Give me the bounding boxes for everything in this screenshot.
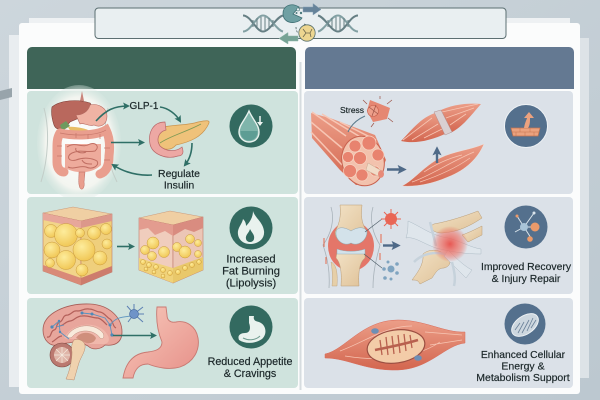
panel: recovery — [304, 197, 573, 294]
illustration: muscle with mitochondrion — [325, 320, 465, 370]
label: regulate insulin: Regulate — [158, 168, 200, 180]
icon: mitochondrion — [504, 304, 546, 344]
arrow: bottom left — [279, 32, 298, 44]
icon: neuron — [110, 304, 144, 325]
callout line: stress — [348, 116, 365, 132]
left column header — [27, 47, 296, 89]
panel: regulate insulin: Insulin — [164, 180, 194, 192]
panel: left column — [27, 47, 298, 388]
arrow: bundle to fibres — [387, 168, 404, 171]
panel: fat burning — [27, 197, 298, 294]
panel: fat burning: Fat Burning — [222, 266, 280, 278]
arrow: fat reduction — [117, 246, 133, 248]
icon: molecule network — [504, 206, 548, 248]
panel: muscle stress — [304, 91, 573, 194]
illustration: torso and digestive organs — [37, 85, 121, 201]
arrow: gut to pancreas — [111, 142, 143, 144]
panel: cellular energy — [304, 298, 573, 388]
illustration: pancreas — [150, 121, 209, 157]
icon: right DNA helix — [318, 16, 358, 32]
arrow: brain to stomach — [113, 334, 155, 336]
label: enhanced cellular energy: Enhanced Cellular — [481, 350, 566, 361]
icon: water drop — [230, 104, 272, 148]
arrow: top right — [303, 4, 321, 15]
label: improved recovery: Improved Recovery — [481, 262, 572, 273]
illustration: muscle bundle — [311, 112, 390, 191]
illustration: stomach — [123, 307, 198, 378]
panel: cellular energy: Energy & — [501, 360, 545, 372]
icon: left DNA helix — [243, 16, 283, 32]
label: GLP-1: GLP-1 — [130, 101, 159, 112]
arrow: GLP-1 to pancreas — [160, 107, 180, 121]
label: reduced appetite: Reduced Appetite — [208, 356, 292, 368]
illustration: damaged muscle — [401, 104, 481, 142]
illustration: stressed fibre — [363, 96, 393, 127]
title banner — [95, 4, 506, 44]
arrow: insulin to gut — [113, 165, 152, 175]
panel: cellular energy: Metabolism Support — [476, 372, 570, 384]
label: increased fat burning: Increased — [226, 254, 276, 266]
arrow: knee to repair — [383, 244, 398, 247]
arrow: growth — [436, 149, 438, 163]
icon: flame — [230, 206, 272, 250]
panel: right column — [304, 47, 574, 388]
illustration: large fat cube — [43, 207, 112, 285]
panel: fat burning: (Lipolysis) — [226, 278, 276, 290]
arrow: pancreas to insulin — [185, 143, 192, 165]
panel: regulate insulin — [27, 85, 298, 201]
illustration: knee joint — [323, 205, 382, 288]
illustration: brain — [43, 304, 122, 380]
icon: inflammation virus — [381, 209, 401, 229]
label: stress: Stress — [340, 105, 364, 115]
icon: repair cells — [382, 260, 399, 280]
illustration: healthy muscle — [402, 144, 484, 186]
icon: enzyme — [283, 5, 310, 33]
icon: metabolite ball — [299, 25, 315, 41]
panel: reduced appetite: & Cravings — [224, 368, 276, 380]
icon: repairing muscle wall — [504, 104, 548, 148]
arrow: stomach to GLP-1 — [96, 106, 128, 121]
illustration: reduced fat cube — [139, 211, 203, 283]
panel: recovery: & Injury Repair — [492, 274, 561, 285]
right column header — [305, 47, 574, 89]
icon: stomach — [230, 306, 272, 348]
illustration: repaired joint — [406, 211, 482, 286]
panel: reduced appetite — [27, 298, 298, 388]
